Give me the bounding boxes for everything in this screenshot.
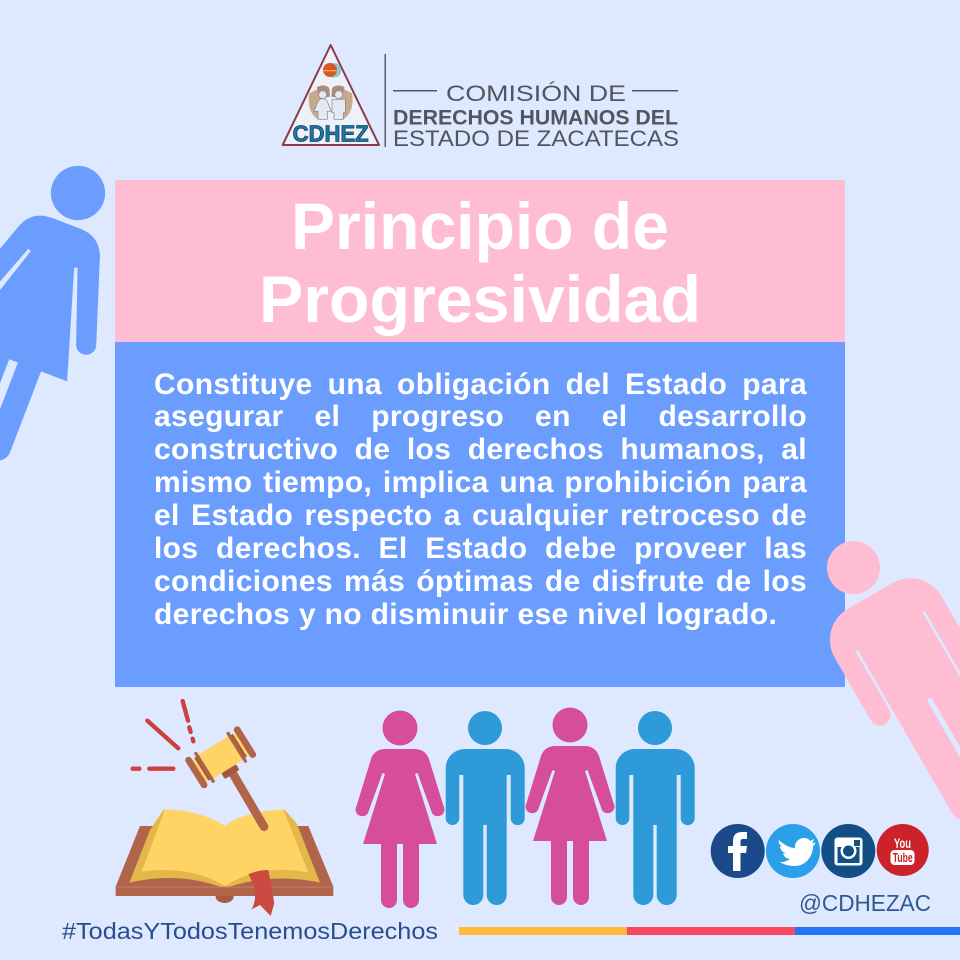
icon: open book with gavel [116, 701, 333, 916]
logo divider line [384, 54, 386, 147]
title: Progresividad [259, 262, 701, 336]
body text: constructivo de los derechos humanos, al [154, 433, 807, 466]
icon: youtube: You [894, 835, 911, 851]
tricolour bar [459, 927, 960, 935]
social handle: @CDHEZAC [799, 890, 931, 916]
logo: CDHEZ triangle emblem: CDHEZ [293, 120, 369, 146]
logo text: ESTADO DE ZACATECAS [393, 126, 679, 151]
panel: blue text background [115, 342, 845, 687]
hashtag: #TodasYTodosTenemosDerechos [62, 918, 438, 944]
icon: instagram [821, 824, 875, 878]
body text: mismo tiempo, implica una prohibición para [154, 466, 807, 499]
icon: youtube: Tube [893, 850, 913, 865]
body text: el Estado respecto a cualquier retroceso de [154, 499, 807, 532]
logo text: COMISIÓN DE [446, 81, 626, 106]
body text: condiciones más óptimas de disfrute de los [154, 565, 807, 598]
title: Principio de [291, 189, 669, 263]
body text [154, 368, 807, 631]
icon: large blue woman figure [0, 142, 155, 479]
title [259, 189, 701, 336]
body text: Constituye una obligación del Estado para [154, 368, 807, 400]
body text: los derechos. El Estado debe proveer las [154, 532, 807, 565]
panel: pink title background [115, 180, 845, 342]
logo text [393, 81, 679, 151]
icon: facebook [711, 824, 765, 878]
body text: derechos y no disminuir ese nivel logrado. [154, 598, 777, 631]
icon: youtube [877, 824, 929, 876]
logo: CDHEZ triangle emblem [283, 45, 379, 146]
body text: asegurar el progreso en el desarrollo [154, 400, 807, 433]
icon: twitter [766, 824, 820, 878]
logo text: DERECHOS HUMANOS DEL [393, 106, 678, 130]
icon: large pink man figure [787, 514, 960, 839]
icon: row of women and men [356, 708, 695, 908]
